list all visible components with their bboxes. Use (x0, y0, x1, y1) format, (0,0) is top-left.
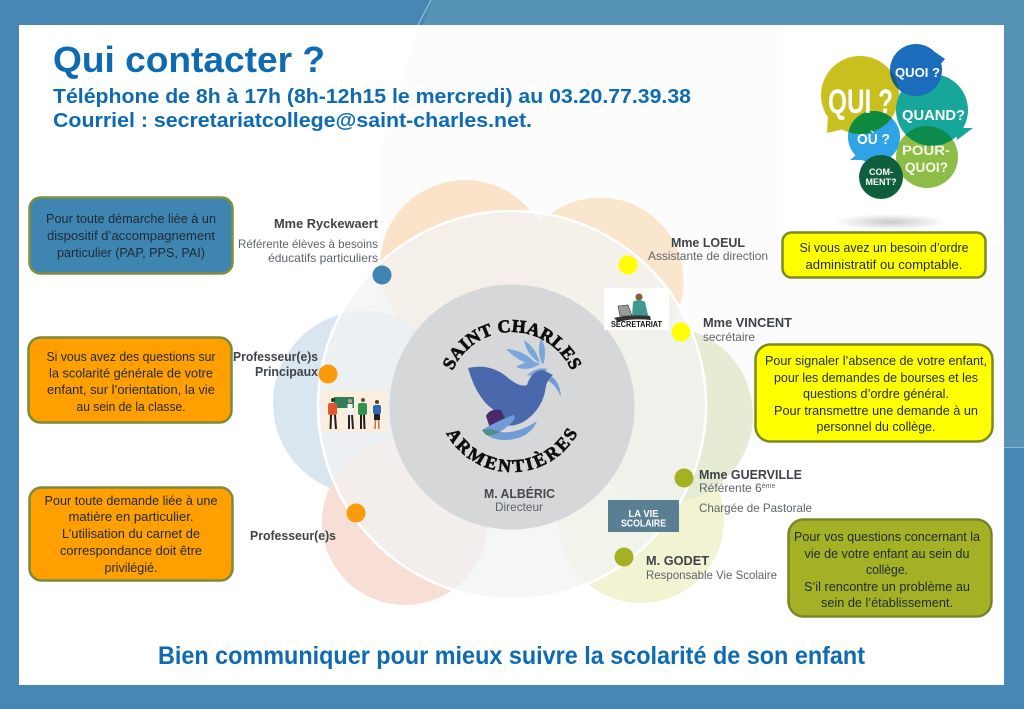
callout: absence: questions d’ordre général. (803, 386, 949, 401)
logo: Saint Charles Armentières: ARMENTIÈRES (446, 428, 577, 472)
label: M. Godet: Responsable Vie Scolaire (646, 568, 777, 582)
label: Mme Vincent: secrétaire (703, 330, 755, 344)
marker: M. Godet (614, 548, 634, 566)
callout: administratif (782, 232, 986, 278)
icon: teachers (322, 391, 387, 432)
callout: absence: personnel du collège. (816, 419, 936, 434)
callout: vie scolaire: S’il rencontre un problème au (804, 579, 970, 594)
contact email: Courriel : secretariatcollege@saint-charles.net. (53, 110, 532, 132)
label: Mme Guerville: ème (762, 483, 775, 490)
callout: accompagnement: Pour toute démarche liée à un (46, 211, 216, 226)
marker: Professeurs principaux (318, 364, 338, 384)
icon: question bubbles (821, 44, 973, 230)
person: M. Albéric (484, 486, 556, 514)
label: Mme Guerville: Référente 6 (699, 481, 762, 495)
icon: question bubbles: POUR- (902, 142, 950, 158)
label: M. Godet: M. GODET (646, 553, 709, 568)
label: Mme Ryckewaert: Mme Ryckewaert (274, 216, 379, 231)
callout: accompagnement (30, 198, 232, 274)
label: Mme Guerville: Chargée de Pastorale (699, 501, 812, 515)
marker: Mme Vincent (672, 322, 690, 342)
label: Professeurs principaux: Professeur(e)s (233, 349, 318, 364)
logo: Saint Charles Armentières (443, 320, 582, 472)
label: M. Godet (646, 553, 777, 582)
label: Mme Ryckewaert: Référente élèves à besoins (238, 237, 378, 251)
callout: matière: correspondance doit être (60, 543, 202, 558)
footer tagline: Bien communiquer pour mieux suivre la scolarité de son enfant (158, 642, 866, 670)
callout: accompagnement: particulier (PAP, PPS, PAI) (57, 245, 205, 260)
callout: vie scolaire (788, 520, 992, 616)
icon: question bubbles: COM- (869, 167, 893, 177)
icon: secrétariat: SECRETARIAT (611, 320, 662, 329)
callout: accompagnement: dispositif d’accompagnement (47, 228, 215, 243)
icon: question bubbles: QUOI ? (895, 65, 940, 80)
callout: scolarité générale: Si vous avez des questions sur (46, 349, 216, 364)
person: M. Albéric: Directeur (495, 500, 543, 514)
callout: vie scolaire: sein de l’établissement. (821, 595, 953, 610)
label: Mme Loeul: Mme LOEUL (671, 235, 745, 250)
callout: vie scolaire: collège. (866, 562, 908, 577)
label: Mme Vincent (703, 315, 792, 344)
label: Mme Ryckewaert (238, 216, 379, 265)
callout: scolarité générale: enfant, sur l’orientation, la vie (47, 382, 215, 397)
icon: question bubbles: QUAND? (902, 107, 965, 124)
callout: matière (30, 488, 232, 580)
icon: question bubbles: OÙ ? (857, 130, 890, 148)
marker: Mme Ryckewaert (372, 266, 392, 284)
label: Mme Loeul: Assistante de direction (648, 249, 768, 263)
callout: vie scolaire: vie de votre enfant au sein du (804, 546, 970, 561)
title: Qui contacter ? (53, 39, 325, 80)
callout: absence: pour les demandes de bourses et les (774, 370, 978, 385)
marker: Mme Guerville (674, 468, 694, 488)
label: Professeurs principaux (233, 349, 319, 379)
callout: scolarité générale: la scolarité générale de votre (49, 366, 213, 380)
person: M. Albéric: M. ALBÉRIC (484, 486, 556, 501)
label: Mme Ryckewaert: éducatifs particuliers (268, 251, 378, 265)
callout: vie scolaire: Pour vos questions concernant la (794, 529, 981, 544)
icon: question bubbles: QUI ? (828, 83, 893, 121)
callout: administratif: Si vous avez un besoin d’ordre (800, 240, 968, 255)
callout: absence (756, 344, 992, 442)
label: Professeurs: Professeur(e)s (250, 528, 336, 543)
icon: la vie scolaire: SCOLAIRE (621, 518, 666, 530)
callout: scolarité générale: au sein de la classe. (76, 399, 186, 414)
icon: la vie scolaire (608, 500, 679, 532)
label: Professeurs principaux: Principaux (255, 364, 319, 379)
logo: Saint Charles Armentières: SAINT CHARLES (443, 320, 582, 370)
marker: Professeurs (346, 504, 366, 522)
icon: la vie scolaire: LA VIE (628, 509, 659, 520)
label: Mme Loeul (648, 235, 768, 263)
icon: question bubbles: QUOI? (905, 159, 948, 175)
label: Mme Guerville: Mme GUERVILLE (699, 467, 802, 482)
callout: matière: L’utilisation du carnet de (62, 526, 200, 541)
callout: administratif: administratif ou comptable. (806, 257, 962, 272)
diagram: overlapping circles (273, 180, 753, 605)
callout: scolarité générale (28, 338, 232, 422)
label: Mme Guerville (699, 467, 812, 515)
label: Mme Vincent: Mme VINCENT (703, 315, 792, 330)
icon: question bubbles: MENT? (866, 177, 896, 187)
callout: matière: privilégié. (104, 560, 158, 575)
callout: matière: matière en particulier. (68, 509, 194, 524)
icon: secrétariat (604, 288, 669, 330)
callout: absence: Pour transmettre une demande à un (774, 403, 978, 418)
callout: absence: Pour signaler l’absence de votre enfant, (765, 353, 987, 368)
contact phone: Téléphone de 8h à 17h (8h-12h15 le mercredi) au 03.20.77.39.38 (53, 86, 691, 108)
marker: Mme Loeul (618, 256, 638, 274)
callout: matière: Pour toute demande liée à une (44, 493, 218, 508)
